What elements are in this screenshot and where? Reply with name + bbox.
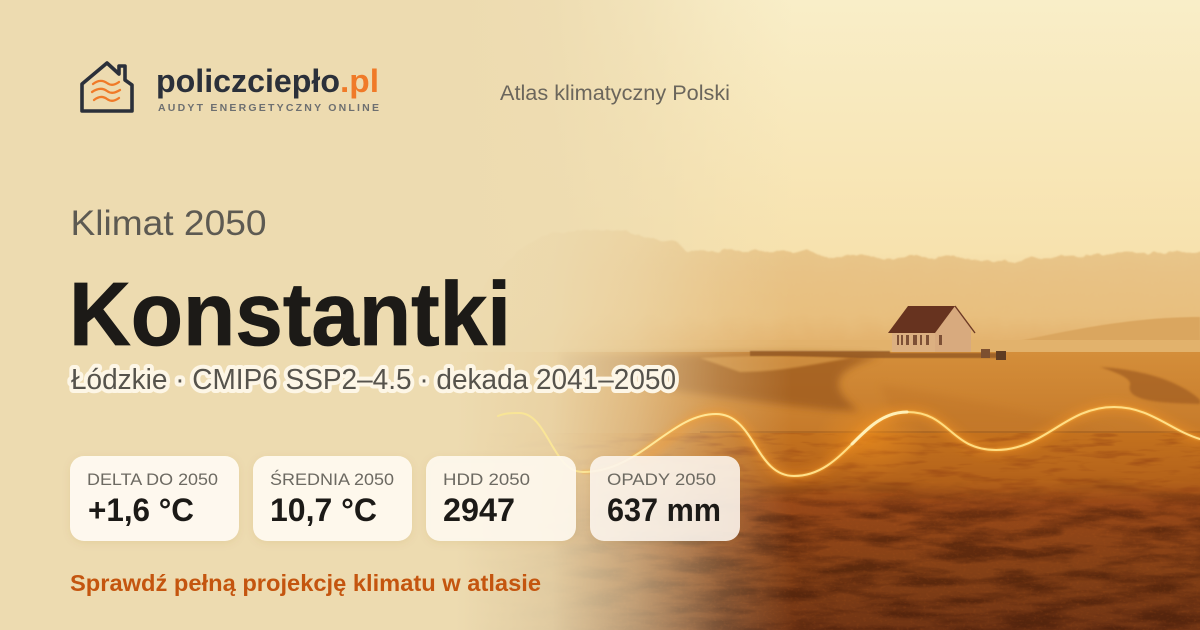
stat card: delta: DELTA DO 2050 [87, 471, 218, 489]
title: city name: Konstantki [69, 265, 511, 365]
stat card: HDD: 2947 [443, 492, 515, 528]
stat card: average [253, 456, 412, 541]
stat card: average: 10,7 °C [270, 492, 377, 528]
logo: wordmark: .pl [340, 63, 379, 99]
logo: wordmark [156, 63, 379, 114]
logo: house icon [82, 63, 132, 111]
stat card: HDD: HDD 2050 [443, 471, 530, 489]
stat card: average: ŚREDNIA 2050 [270, 470, 394, 489]
landscape: wheat field [450, 433, 1200, 630]
stat card: delta: +1,6 °C [88, 492, 194, 528]
landscape: dunes [450, 352, 1200, 434]
stat card: HDD [426, 456, 576, 541]
eyebrow: Klimat 2050: Klimat 2050 [70, 204, 266, 243]
logo: wordmark: policzciepło [156, 63, 340, 99]
illustration: house [750, 306, 1006, 360]
subtitle with white halo: Łódzkie · CMIP6 SSP2–4.5 · dekada 2041–2050 [71, 364, 676, 396]
glowing temperature wave [498, 400, 1200, 480]
logo: wordmark: AUDYT ENERGETYCZNY ONLINE [158, 102, 379, 114]
stat card: precipitation [590, 456, 740, 541]
stat card: precipitation: OPADY 2050 [607, 471, 716, 489]
subtitle with white halo: Łódzkie · CMIP6 SSP2–4.5 · dekada 2041–2050 [71, 364, 676, 396]
stat card: precipitation: 637 mm [607, 492, 721, 528]
call to action: Sprawdź pełną projekcję klimatu w atlasie [70, 570, 541, 596]
landscape: tree line and hills [588, 230, 1200, 352]
header tagline: Atlas klimatyczny Polski [500, 81, 730, 105]
stat card: delta [70, 456, 239, 541]
